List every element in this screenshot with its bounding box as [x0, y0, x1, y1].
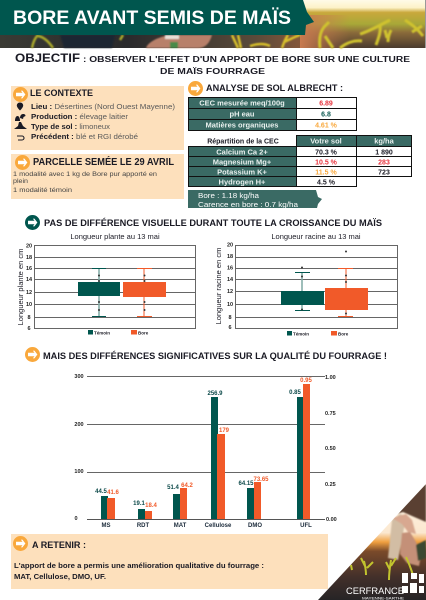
heading: a retenir: A RETENIR :: [32, 540, 86, 551]
table: analyse de sol: pH eau: [229, 110, 255, 118]
panel: parcelle semée: [11, 154, 184, 199]
box plot: longueur plante: 20: [26, 244, 32, 250]
table: analyse de sol: 4.61 %: [315, 122, 338, 130]
panel: a retenir: [11, 534, 328, 589]
box plot: longueur plante: 16: [26, 266, 32, 272]
table: analyse de sol: [188, 97, 357, 131]
left axis: 200: [74, 422, 84, 428]
heading: le contexte: LE CONTEXTE: [30, 88, 93, 98]
box plot: longueur racine: 8: [228, 315, 232, 321]
value labels: 18.4: [145, 503, 157, 509]
icon: location pin: [17, 102, 23, 110]
table: analyse de sol: 6.89: [319, 100, 333, 108]
value labels: 64.2: [181, 483, 193, 489]
logo: cerfrance: [346, 573, 424, 600]
legend: Bore: [138, 330, 149, 336]
objective heading: OBJECTIF: [15, 53, 80, 65]
right axis: [325, 375, 337, 523]
logo: cerfrance: CERFRANCE: [346, 586, 404, 597]
left axis: [74, 374, 84, 522]
bars: [101, 397, 303, 519]
heading: pas de différence: [25, 215, 382, 230]
right axis: 0.50: [325, 446, 336, 452]
category labels: DMO: [248, 523, 262, 529]
icon: arrow parcelle: [15, 155, 30, 170]
box plot: longueur plante: [16, 232, 196, 336]
table: analyse de sol: Matières organiques: [206, 120, 278, 130]
table: répartition de la cec: 283: [378, 160, 390, 166]
bar chart: qualité du fourrage: [74, 374, 337, 529]
context line: production: Production : élevage laitier: [31, 114, 129, 121]
category labels: Cellulose: [205, 523, 232, 529]
chart title: Longueur plante au 13 mai: [70, 232, 160, 241]
table: répartition de la cec: Votre sol: [310, 136, 342, 146]
title banner: [0, 0, 314, 35]
value labels: 64.15: [238, 481, 254, 487]
legend: Témoin: [94, 330, 110, 336]
conclusion text: MAT, Cellulose, DMO, UF.: [14, 574, 106, 581]
legend: Témoin: [293, 332, 309, 336]
box plot: longueur racine: [214, 232, 398, 336]
value labels: 19.1: [133, 501, 145, 507]
value labels: 256.9: [207, 391, 223, 397]
heading: parcelle: PARCELLE SEMÉE LE 29 AVRIL: [33, 155, 174, 168]
category labels: RDT: [137, 523, 149, 529]
table: répartition de la cec: 1 890: [375, 150, 393, 156]
left axis: 0: [74, 516, 78, 522]
category labels: [102, 523, 312, 529]
parcelle text: 1 modalité avec 1 kg de Bore pur apporté en: [13, 171, 157, 178]
callout: bore: [188, 190, 322, 209]
legend: Bore: [338, 332, 349, 336]
box plot: longueur racine: 6: [228, 325, 232, 331]
table: répartition de la cec: 10.5 %: [315, 160, 338, 166]
objective heading: DE MAÏS FOURRAGE: [160, 66, 265, 76]
title banner: BORE AVANT SEMIS DE MAÏS: [13, 6, 291, 29]
heading: différences significatives: MAIS DES DIFFÉRENCES SIGNIFICATIVES SUR LA QUALITÉ DU FOURRAGE !: [43, 351, 387, 361]
value labels: 51.4: [167, 485, 179, 491]
panel: le contexte: [11, 86, 184, 150]
box plot: longueur racine: 12: [227, 289, 233, 295]
parcelle text: 1 modalité témoin: [13, 187, 72, 194]
value labels: 0.85: [289, 390, 301, 396]
value labels: 0.95: [300, 378, 312, 384]
right axis: 0.25: [325, 482, 336, 488]
table: répartition de la cec: Hydrogen H+: [219, 178, 266, 186]
chart title: Longueur racine au 13 mai: [271, 232, 361, 241]
category labels: UFL: [300, 523, 312, 529]
left axis: 300: [74, 374, 84, 380]
table: répartition de la cec: Magnesium Mg+: [213, 158, 272, 166]
value labels: [95, 378, 312, 509]
box plot: longueur racine: 20: [227, 242, 233, 248]
photo corner with hand and seedlings: [318, 484, 426, 600]
right axis: 1.00: [325, 375, 336, 381]
table: répartition de la cec: 70.3 %: [315, 150, 338, 156]
axis label: Longueur racine en cm: [214, 248, 223, 324]
heading: pas de différence: PAS DE DIFFÉRENCE VISUELLE DURANT TOUTE LA CROISSANCE DU MAÏS: [44, 218, 382, 228]
left axis: 100: [74, 469, 84, 475]
table: analyse de sol: CEC mesurée meq/100g: [199, 98, 285, 108]
heading: analyse de sol: ANALYSE DE SOL ALBRECHT :: [206, 83, 343, 93]
icon: production: [15, 114, 26, 121]
objective heading: : OBSERVER L'EFFET D'UN APPORT DE BORE SUR UNE CULTURE: [83, 54, 410, 64]
callout: bore: Bore : 1.18 kg/ha: [198, 193, 259, 200]
callout: bore: Carence en bore : 0.7 kg/ha: [198, 202, 298, 209]
conclusion text: [14, 563, 264, 581]
right axis: 0.00: [326, 517, 337, 523]
value labels: 73.65: [253, 477, 269, 483]
value labels: 44.5: [95, 489, 107, 495]
conclusion text: L'apport de bore a permis une amélioration qualitative du fourrage :: [14, 563, 264, 570]
table: répartition de la cec: Potassium K+: [217, 168, 268, 176]
objective heading: [15, 53, 410, 76]
value labels: 179: [219, 428, 230, 434]
table: analyse de sol: 6.8: [321, 112, 331, 118]
heading: différences significatives: [25, 347, 387, 362]
box plot: longueur plante: 18: [26, 255, 32, 261]
axis label: Longueur plante en cm: [16, 249, 25, 325]
value labels: 41.6: [107, 490, 119, 496]
box plot: longueur racine: 16: [227, 266, 233, 272]
icon: arrow retenir: [13, 536, 28, 551]
table: répartition de la cec: kg/ha: [374, 136, 395, 146]
box plot: longueur plante: 6: [27, 326, 31, 332]
table: répartition de la cec: Calcium Ca 2+: [216, 148, 268, 156]
box plot: longueur plante: 12: [26, 290, 32, 296]
box plot: longueur racine: 14: [227, 277, 234, 283]
box plot: longueur racine: 10: [227, 302, 233, 308]
table: répartition de la cec: 723: [378, 170, 390, 176]
box plot: longueur plante: 8: [27, 315, 31, 321]
right axis: 0.75: [325, 411, 336, 417]
legend: [88, 330, 149, 336]
category labels: MS: [102, 523, 110, 529]
box plot: longueur plante: 10: [26, 302, 32, 308]
parcelle text: plein: [13, 178, 28, 185]
table: répartition de la cec: [188, 135, 412, 187]
context line: type de sol: Type de sol : limoneux: [31, 124, 111, 131]
table: répartition de la cec: 4.5 %: [317, 180, 336, 186]
box plot: longueur plante: 14: [26, 277, 33, 283]
legend: [287, 331, 349, 336]
table: répartition de la cec: 11.5 %: [315, 170, 337, 176]
icon: previous crop: [17, 136, 24, 140]
box plot: longueur racine: 18: [227, 254, 233, 260]
parcelle text: [13, 171, 157, 194]
category labels: MAT: [174, 523, 187, 529]
heading: analyse de sol: [188, 81, 343, 96]
icon: soil: [14, 122, 27, 129]
context line: précédent: Précédent : blé et RGI dérobé: [31, 134, 138, 141]
context line: lieu: Lieu : Désertines (Nord Ouest Mayenne): [31, 104, 175, 111]
table: répartition de la cec: Répartition de la CEC: [207, 138, 279, 146]
header photo band: [0, 0, 426, 48]
icon: arrow contexte: [13, 87, 28, 102]
